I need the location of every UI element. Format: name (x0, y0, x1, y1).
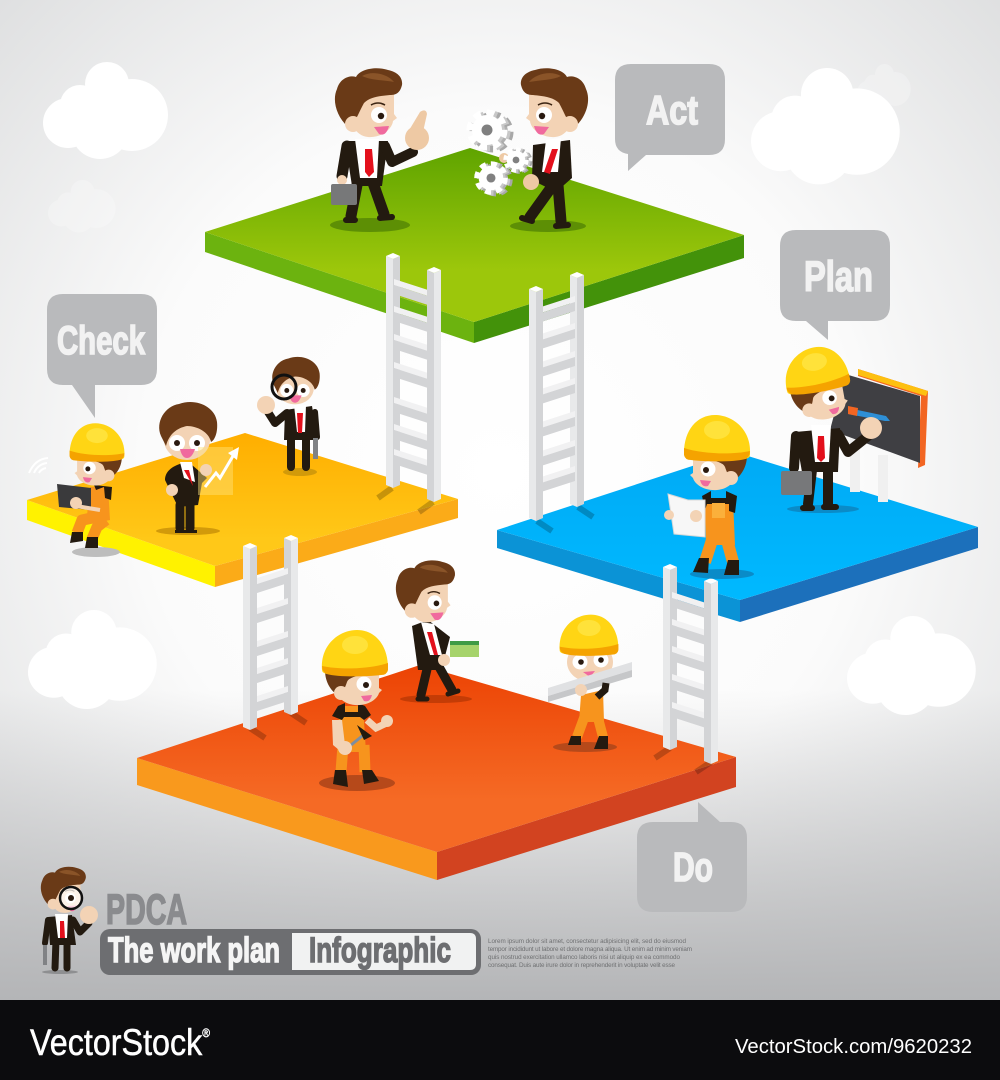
text block: lorem ipsum (488, 938, 692, 969)
character: businessman with magnifier (257, 357, 320, 476)
character: businessman with chart (156, 402, 239, 535)
speech bubble: Plan: Plan (804, 253, 873, 301)
platform: Plan (blue) (497, 452, 978, 622)
title bar: The work plan (108, 931, 280, 970)
character: worker with map (664, 415, 754, 579)
footer bar (0, 1000, 1000, 1080)
icon: blackboard (830, 369, 928, 502)
clouds (28, 62, 976, 715)
speech bubble: Do: Do (673, 844, 713, 890)
footer bar: ® (202, 1026, 210, 1040)
platform: Do (orange) (137, 665, 736, 880)
character: businessman in helmet with pen (780, 342, 890, 513)
heading: PDCA: PDCA (106, 886, 187, 934)
title bar: Infographic (309, 931, 451, 970)
text block: lorem ipsum: Lorem ipsum dolor sit amet, consectetur adipisicing elit, sed do eiusmod (488, 938, 686, 945)
text block: lorem ipsum: quis nostrud exercitation ullamco laboris nisi ut aliquip ex ea commodo (488, 954, 680, 961)
character: businessman footer mascot (41, 867, 98, 974)
title bar (100, 929, 481, 975)
character: worker with tablet (57, 423, 125, 557)
speech bubble: Check: Check (57, 319, 146, 363)
text block: lorem ipsum: consequat. Duis aute irure dolor in reprehenderit in voluptate velit esse (488, 962, 675, 969)
speech bubble: Plan (780, 230, 890, 340)
platform: Act (green) (205, 148, 744, 343)
speech bubble: Act (615, 64, 725, 171)
platform: Check (yellow) (27, 433, 458, 587)
ladder: Do to Plan (655, 564, 718, 772)
character: businessman pointing (330, 68, 429, 232)
footer bar: VectorStock (30, 1022, 227, 1063)
speech bubble: Do (637, 802, 747, 912)
character: businessman with gears (470, 68, 588, 232)
speech bubble: Check (47, 294, 157, 418)
ladder: Check to Act (378, 253, 441, 512)
ladder: Plan to Act (529, 272, 593, 531)
text block: lorem ipsum: tempor incididunt ut labore et dolore magna aliqua. Ut enim ad minim veniam (488, 946, 692, 953)
character: businessman with money (396, 560, 479, 703)
character: worker carrying beam (548, 615, 632, 752)
character: worker with hammer (319, 630, 395, 791)
ladder: Check to Do (243, 535, 306, 738)
speech bubble: Act: Act (646, 87, 698, 133)
footer bar: VectorStock.com/9620232 (735, 1036, 972, 1058)
icon: wifi signal (29, 458, 48, 473)
